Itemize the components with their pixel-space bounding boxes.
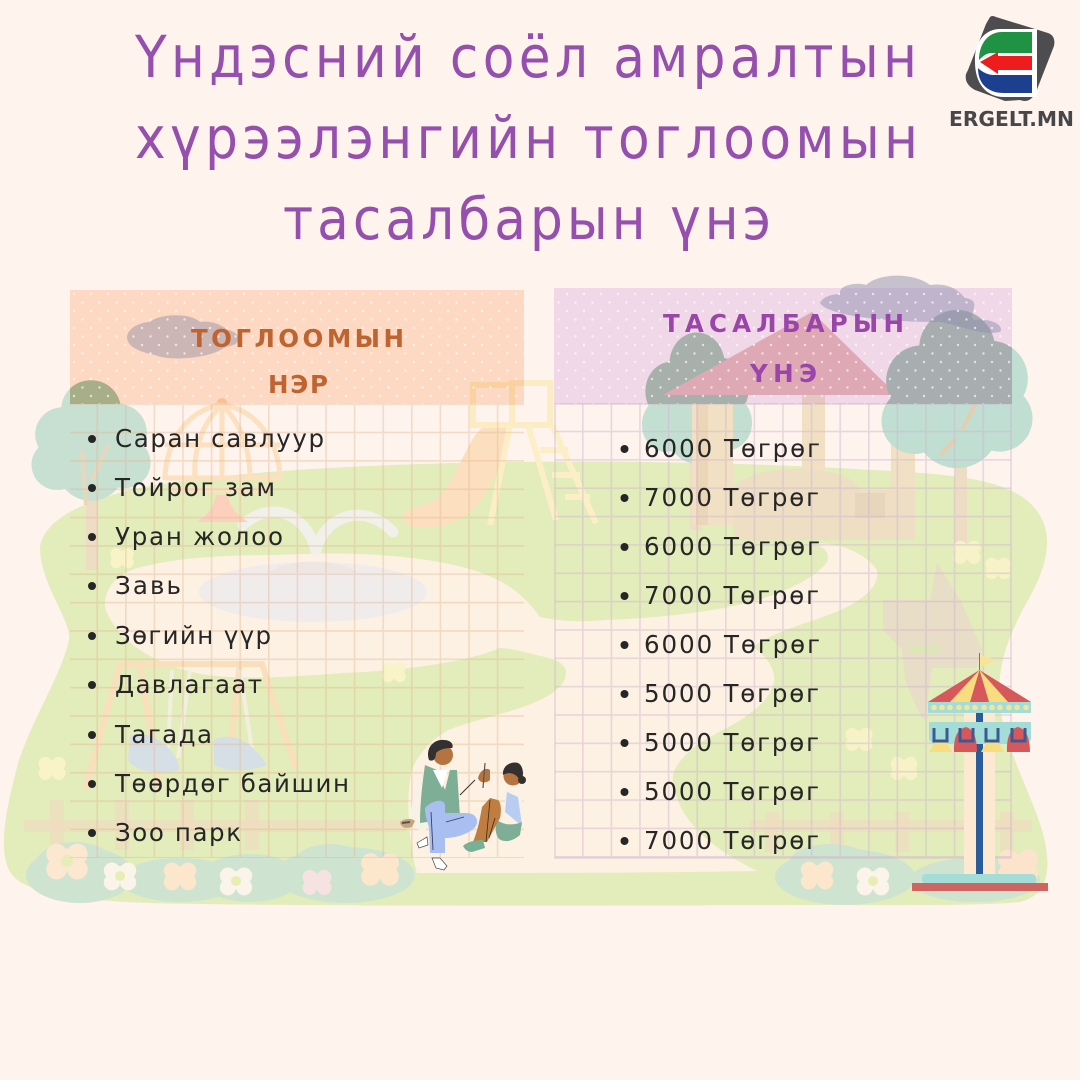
list: game names — [88, 424, 349, 847]
big tree canopy in right header — [886, 310, 1012, 404]
heading: game name: НЭР — [268, 370, 328, 399]
list: game names: Завь — [115, 571, 181, 600]
flowers — [38, 541, 1038, 895]
title — [134, 24, 918, 253]
list: game names: Зөгийн үүр — [115, 621, 271, 650]
illustration: park scene — [4, 310, 1047, 906]
heading: game name — [191, 324, 404, 399]
title: тасалбарын үнэ — [283, 186, 771, 253]
list: game names: Зоо парк — [115, 818, 241, 847]
gazebo — [692, 395, 915, 540]
swing set — [85, 664, 296, 790]
fountain arcs — [243, 512, 393, 550]
list: game names: Тойрог зам — [114, 473, 275, 502]
right big tree — [881, 310, 1033, 545]
footpath — [105, 544, 877, 873]
list: game names: Саран савлуур — [115, 424, 324, 453]
list: ticket prices: 6000 Төгрөг — [644, 630, 820, 659]
woman — [400, 740, 490, 870]
list: ticket prices: 6000 Төгрөг — [644, 434, 820, 463]
girl — [463, 762, 526, 852]
logo: ERGELT.MN — [949, 16, 1074, 131]
list: game names: Давлагаат — [115, 670, 262, 699]
title: Үндэсний соёл амралтын — [134, 24, 917, 91]
list: ticket prices: 5000 Төгрөг — [644, 777, 819, 806]
list: game names: Тагада — [114, 720, 212, 749]
panel: game name grid — [70, 404, 524, 858]
pond — [199, 562, 427, 622]
list: ticket prices: 7000 Төгрөг — [644, 483, 819, 512]
bench — [883, 563, 982, 720]
small tree canopy in right header — [645, 332, 748, 404]
list: ticket prices: 7000 Төгрөг — [644, 581, 819, 610]
carousel flag — [980, 653, 996, 670]
panel: ticket price header band — [554, 288, 1012, 404]
gazebo roof — [663, 312, 897, 395]
illustration: woman and girl sitting — [400, 740, 526, 870]
carousel band — [928, 702, 1031, 713]
heading: ticket price: ҮНЭ — [749, 359, 817, 388]
panel: game name header band — [70, 290, 524, 404]
carousel seats — [929, 722, 1031, 752]
logo letter E — [975, 29, 1037, 97]
logo badge — [966, 16, 1054, 101]
bushes — [26, 842, 1040, 905]
list: game names: Төөрдөг байшин — [114, 769, 349, 798]
park lawn — [4, 462, 1047, 906]
list: ticket prices: 5000 Төгрөг — [644, 728, 819, 757]
heading: ticket price — [663, 309, 904, 388]
title: хүрээлэнгийн тоглоомын — [135, 105, 918, 172]
tree shade in left header — [70, 380, 122, 404]
list: ticket prices — [620, 434, 820, 855]
list: game names: Уран жолоо — [115, 522, 283, 551]
left tree — [31, 380, 151, 570]
carousel pillar — [964, 713, 995, 875]
slide — [403, 383, 596, 527]
domed climber — [165, 398, 282, 522]
list: ticket prices: 7000 Төгрөг — [644, 826, 819, 855]
carousel pole — [976, 712, 983, 875]
carousel base — [912, 874, 1048, 891]
heading: game name: ТОГЛООМЫН — [191, 324, 404, 353]
heading: ticket price: ТАСАЛБАРЫН — [663, 309, 904, 338]
carousel canopy — [928, 670, 1031, 702]
clouds — [127, 276, 1001, 358]
list: ticket prices: 5000 Төгрөг — [644, 679, 819, 708]
logo wordmark: ERGELT.MN — [949, 107, 1074, 131]
fences — [24, 800, 1032, 852]
list: ticket prices: 6000 Төгрөг — [644, 532, 820, 561]
right small tree — [642, 332, 752, 530]
illustration: carousel tower — [912, 653, 1048, 891]
dot pattern on header bands — [70, 288, 1012, 404]
panel: ticket price grid — [555, 404, 1011, 858]
